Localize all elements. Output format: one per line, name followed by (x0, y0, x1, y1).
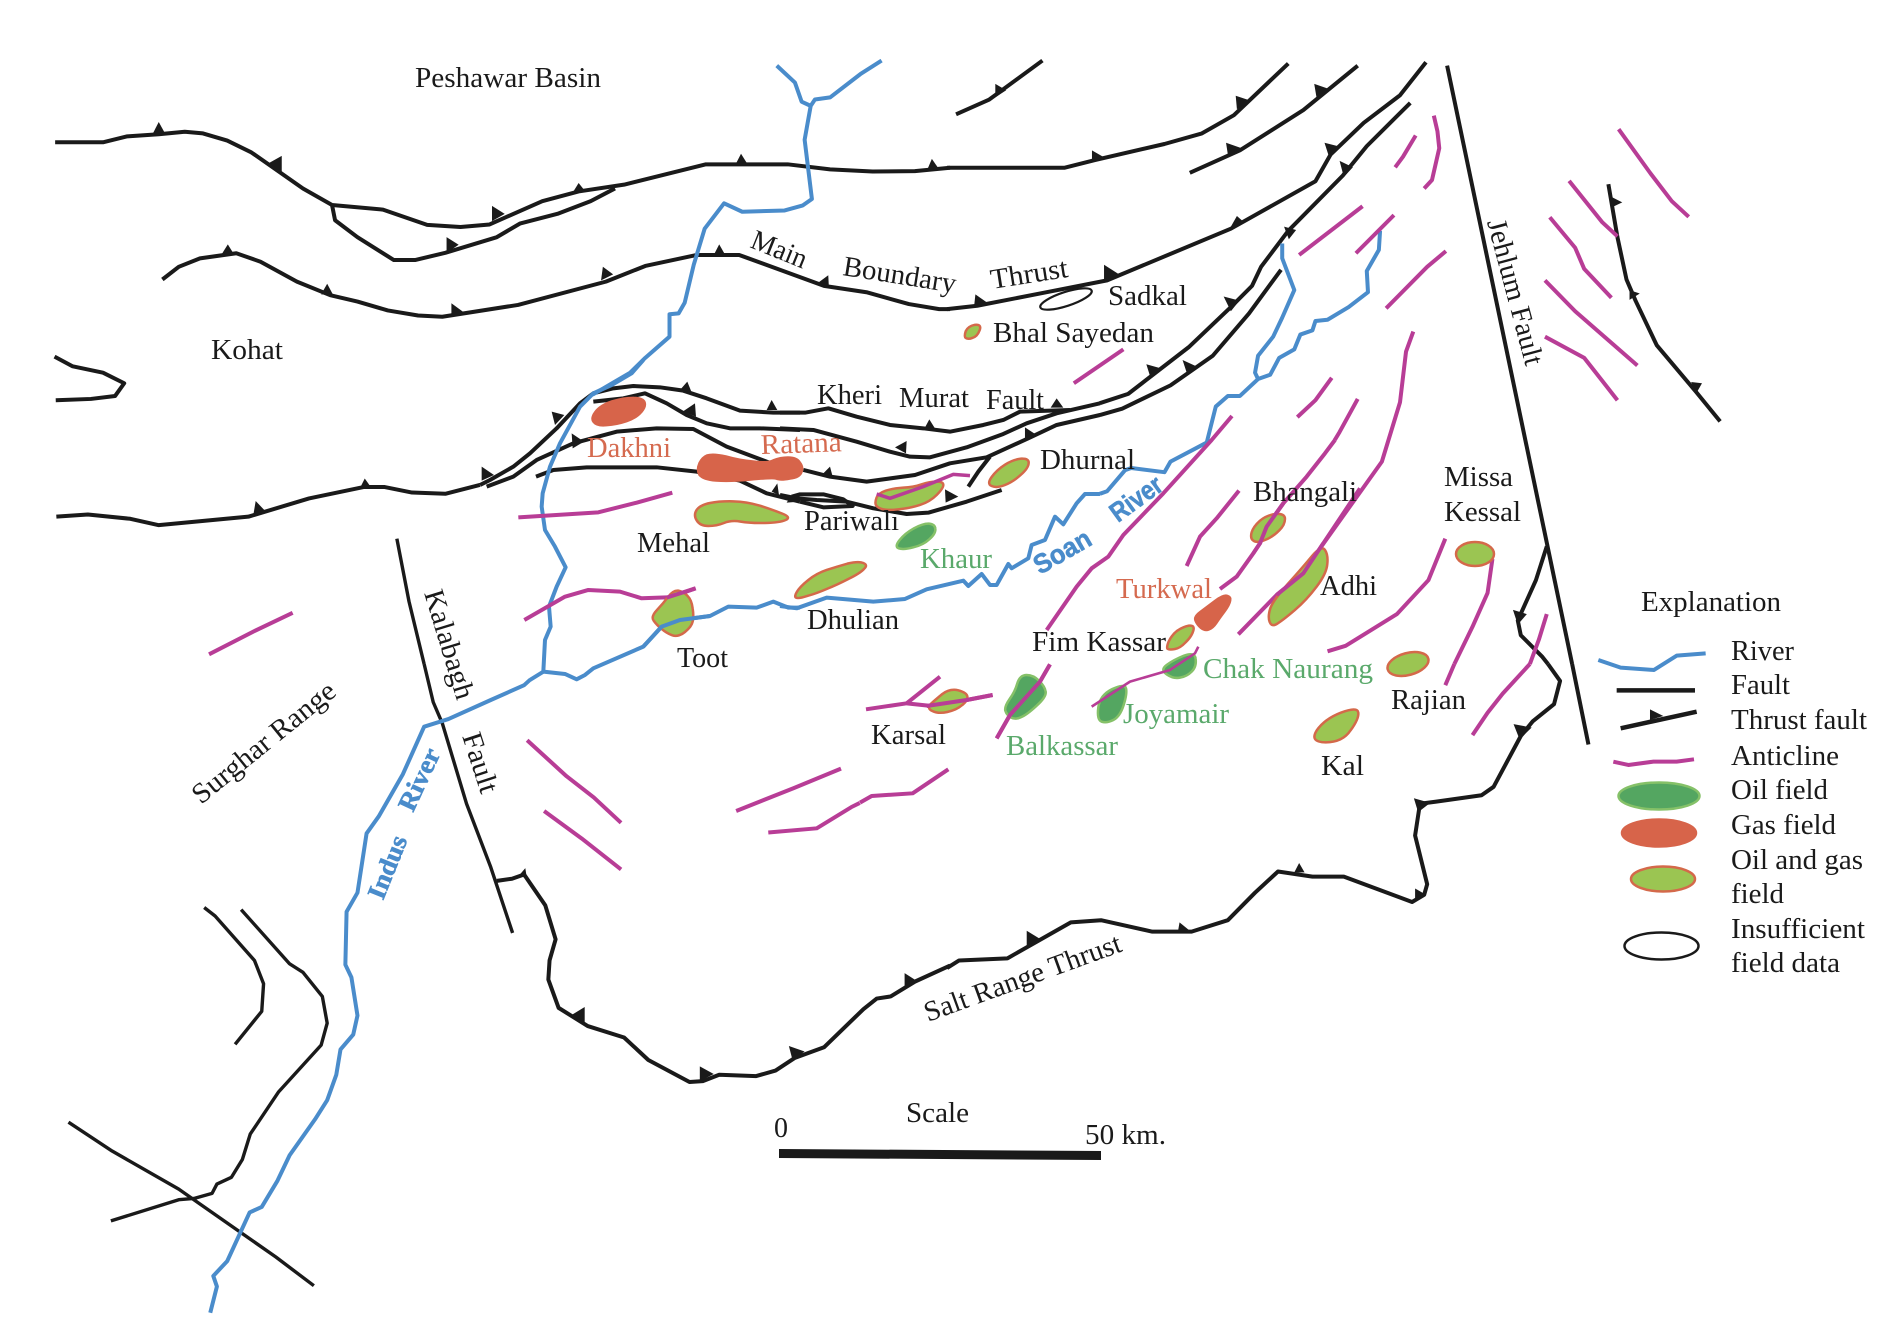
legend text: Thrust fault: Thrust fault (1731, 705, 1867, 736)
label: Boundary: Boundary (841, 251, 959, 300)
legend heading: Explanation (1641, 587, 1781, 618)
label: Thrust: Thrust (988, 253, 1070, 296)
label: Peshawar Basin: Peshawar Basin (415, 63, 601, 94)
scale end: 50 km. (1085, 1120, 1166, 1151)
label: Adhi: Adhi (1320, 571, 1377, 602)
thrust fault: second top-right segment (1190, 66, 1358, 173)
legend item: anticline (1613, 759, 1694, 765)
gas field: Dakhni (592, 397, 645, 426)
oil field: Joyamair (1098, 686, 1126, 722)
label: Toot: Toot (677, 643, 728, 674)
river crossing Toot field (643, 616, 710, 647)
faults: south-west corner (68, 908, 327, 1286)
legend item: oil field (1618, 782, 1700, 810)
label: Kessal: Kessal (1444, 497, 1521, 528)
label: Indus: Indus (362, 831, 413, 903)
fault: Kohat west arc (55, 357, 124, 400)
label: Dhulian: Dhulian (807, 605, 899, 636)
legend: Explanation (1598, 587, 1867, 979)
label: Missa Kessal: Missa (1444, 462, 1513, 493)
oil and gas field: Toot (653, 591, 693, 636)
label: Soan: Soan (1028, 523, 1097, 580)
label: Kohat: Kohat (211, 335, 283, 366)
thrust fault: upper Peshawar thrust with branch (55, 64, 1288, 260)
label: Balkassar: Balkassar (1006, 731, 1119, 762)
anticlines: map-wide fold axes (209, 116, 1689, 869)
oil field: Chak Naurang (1163, 654, 1196, 678)
legend text: field data: field data (1731, 948, 1840, 979)
thrust fault: Kheri Murat third line (487, 270, 1281, 487)
label: Ratana: Ratana (760, 427, 843, 461)
label: Surghar Range: Surghar Range (186, 676, 342, 810)
oil and gas field: Mehal (695, 501, 788, 526)
label: Bhal Sayedan: Bhal Sayedan (993, 318, 1154, 349)
legend item: insufficient field data (1624, 932, 1698, 960)
label: Chak Naurang: Chak Naurang (1203, 654, 1373, 685)
label: Dhurnal: Dhurnal (1040, 445, 1135, 476)
label: River (Indus): River (392, 743, 446, 816)
insufficient data field: Sadkal (1038, 284, 1094, 314)
legend text: Gas field: Gas field (1731, 810, 1836, 841)
label: River (Soan): River (1104, 469, 1169, 528)
legend item: thrust fault (1621, 709, 1697, 728)
label: Jehlum Fault: Jehlum Fault (1480, 216, 1549, 369)
legend text: Anticline: Anticline (1731, 741, 1839, 772)
oil field: Balkassar (1005, 675, 1046, 719)
label: Karsal: Karsal (871, 720, 946, 751)
scale line (779, 1149, 1101, 1160)
legend text: Oil and gas: Oil and gas (1731, 845, 1863, 876)
scale start: 0 (774, 1113, 788, 1144)
label: Sadkal: Sadkal (1108, 281, 1187, 312)
river: Indus River and tributaries (210, 61, 882, 1313)
label: Joyamair: Joyamair (1123, 699, 1230, 730)
label: Turkwal: Turkwal (1116, 574, 1212, 605)
thrust fault: right of Jehlum Fault (1608, 184, 1720, 421)
thrust fault: small top segment (956, 61, 1042, 114)
oil and gas field: Fim Kassar (1167, 626, 1194, 649)
label: Dakhni: Dakhni (587, 433, 671, 464)
gas field: Ratana (698, 454, 803, 481)
label: Murat: Murat (899, 383, 969, 414)
label: Mehal: Mehal (637, 528, 710, 559)
thrust fault: lowest fault of the Kheri Murat zone (536, 467, 1002, 514)
fault: Jehlum Fault (1447, 66, 1588, 744)
scale bar (774, 1098, 1166, 1160)
oil and gas field: Dhulian (795, 562, 866, 598)
oil and gas field: Dhurnal (989, 459, 1029, 487)
anticlines drawn over fields (667, 474, 1323, 738)
oil and gas field: Bhangali (1251, 514, 1285, 542)
oil and gas field: Karsal (929, 690, 967, 713)
legend item: gas field (1622, 819, 1696, 847)
label: Fim Kassar: Fim Kassar (1032, 627, 1167, 658)
legend text: Fault: Fault (1731, 670, 1790, 701)
gas field: Turkwal (1195, 595, 1231, 631)
legend text: River: River (1731, 636, 1794, 667)
legend text: Oil field: Oil field (1731, 775, 1828, 806)
label: Khaur: Khaur (920, 544, 993, 575)
label: Main: Main (746, 225, 812, 275)
thrust fault: Kheri Murat second line (593, 103, 1410, 457)
legend text: field: field (1731, 879, 1784, 910)
oil and gas field: Pariwali (875, 482, 943, 510)
thrust fault: Salt Range Thrust (497, 546, 1560, 1082)
label: Fault (Kalabagh): Fault (455, 729, 504, 797)
legend item: river (1598, 653, 1706, 670)
scale title: Scale (906, 1098, 969, 1129)
oil and gas field: Rajian (1385, 648, 1431, 680)
label: Rajian: Rajian (1391, 685, 1466, 716)
label: Kal: Kal (1321, 751, 1364, 782)
oil and gas field: Kal (1314, 710, 1358, 742)
oil and gas field: Bhal Sayedan (965, 325, 980, 339)
legend text: Insufficient: Insufficient (1731, 914, 1865, 945)
thrust fault: Main Boundary Thrust (162, 62, 1426, 317)
oil and gas field: Missa Kessal (1456, 542, 1494, 566)
label: Kheri: Kheri (817, 380, 882, 411)
thrust fault: Kheri Murat Fault top line (56, 382, 1070, 525)
fault: Kalabagh Fault (397, 539, 513, 933)
label: Bhangali: Bhangali (1253, 477, 1357, 508)
legend item: fault (1617, 688, 1695, 693)
label: Fault: Fault (986, 385, 1044, 416)
label: Pariwali: Pariwali (804, 506, 899, 537)
label: Kalabagh: Kalabagh (417, 586, 480, 703)
label: Salt Range Thrust: Salt Range Thrust (920, 928, 1126, 1029)
oil field: Khaur (897, 524, 935, 549)
river: Soan River (543, 231, 1380, 679)
legend item: oil and gas field (1631, 866, 1695, 892)
oil and gas field: Adhi (1269, 548, 1328, 625)
